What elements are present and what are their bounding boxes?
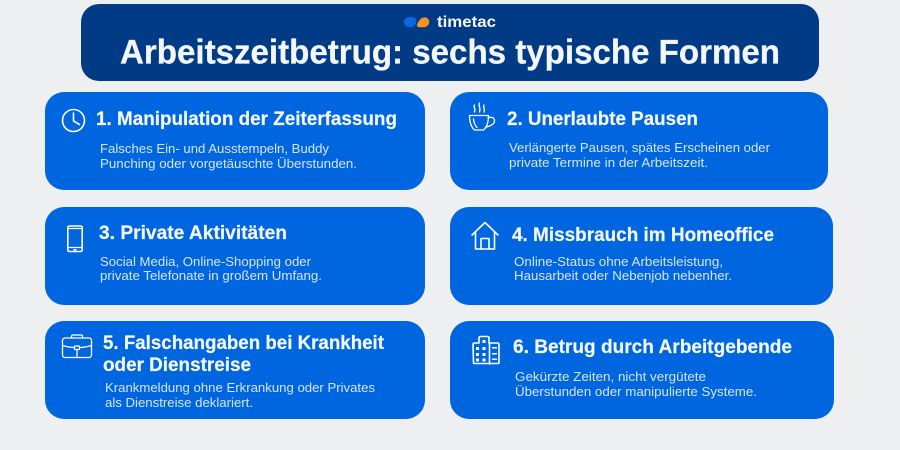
heading 5 xyxy=(103,332,384,376)
description 2 xyxy=(509,140,771,170)
description 4: Online-Status ohne Arbeitsleistung, xyxy=(514,254,723,269)
icon: coffee cup xyxy=(470,103,494,130)
icon: briefcase xyxy=(62,335,92,358)
panel: 5 Falschangaben bei Krankheit oder Dienstreise xyxy=(45,321,425,419)
panel: 1 Manipulation der Zeiterfassung xyxy=(45,92,425,190)
panel: 6 Betrug durch Arbeitgebende xyxy=(450,321,834,419)
description 6: Gekürzte Zeiten, nicht vergütete xyxy=(515,369,706,384)
panel: 2 Unerlaubte Pausen xyxy=(450,92,828,190)
title: Arbeitszeitbetrug: sechs typische Formen xyxy=(120,34,780,72)
description 6: Überstunden oder manipulierte Systeme. xyxy=(515,384,757,399)
panel: 4 Missbrauch im Homeoffice xyxy=(450,207,833,305)
description 5: als Dienstreise deklariert. xyxy=(105,395,253,410)
heading 5: oder Dienstreise xyxy=(103,354,251,376)
description 2: Verlängerte Pausen, spätes Erscheinen oder xyxy=(509,140,771,155)
heading 4: 4. Missbrauch im Homeoffice xyxy=(512,224,774,246)
panel: 3 Private Aktivitäten xyxy=(45,207,425,305)
icon: office buildings xyxy=(473,336,499,364)
heading 5: 5. Falschangaben bei Krankheit xyxy=(103,332,384,354)
description 5: Krankmeldung ohne Erkrankung oder Privates xyxy=(105,380,376,395)
description 3: private Telefonate in großem Umfang. xyxy=(100,268,322,283)
description 2: private Termine in der Arbeitszeit. xyxy=(509,155,708,170)
heading 3: 3. Private Aktivitäten xyxy=(99,222,287,244)
description 1 xyxy=(100,141,357,171)
icon: smartphone xyxy=(68,226,82,252)
description 6 xyxy=(515,369,757,399)
description 3: Social Media, Online-Shopping oder xyxy=(100,254,312,269)
icon: house xyxy=(472,222,498,249)
heading 6: 6. Betrug durch Arbeitgebende xyxy=(513,336,792,358)
description 1: Punching oder vorgetäuschte Überstunden. xyxy=(100,156,357,171)
header banner xyxy=(81,4,819,81)
logo: timetac xyxy=(404,14,496,31)
heading 1: 1. Manipulation der Zeiterfassung xyxy=(96,108,397,130)
description 4 xyxy=(514,254,732,283)
description 1: Falsches Ein- und Ausstempeln, Buddy xyxy=(100,141,329,156)
heading 2: 2. Unerlaubte Pausen xyxy=(507,108,698,130)
icon: clock xyxy=(62,110,84,132)
description 4: Hausarbeit oder Nebenjob nebenher. xyxy=(514,268,732,283)
description 3 xyxy=(100,254,322,283)
description 5 xyxy=(105,380,376,410)
logo: timetac: timetac xyxy=(437,14,496,31)
